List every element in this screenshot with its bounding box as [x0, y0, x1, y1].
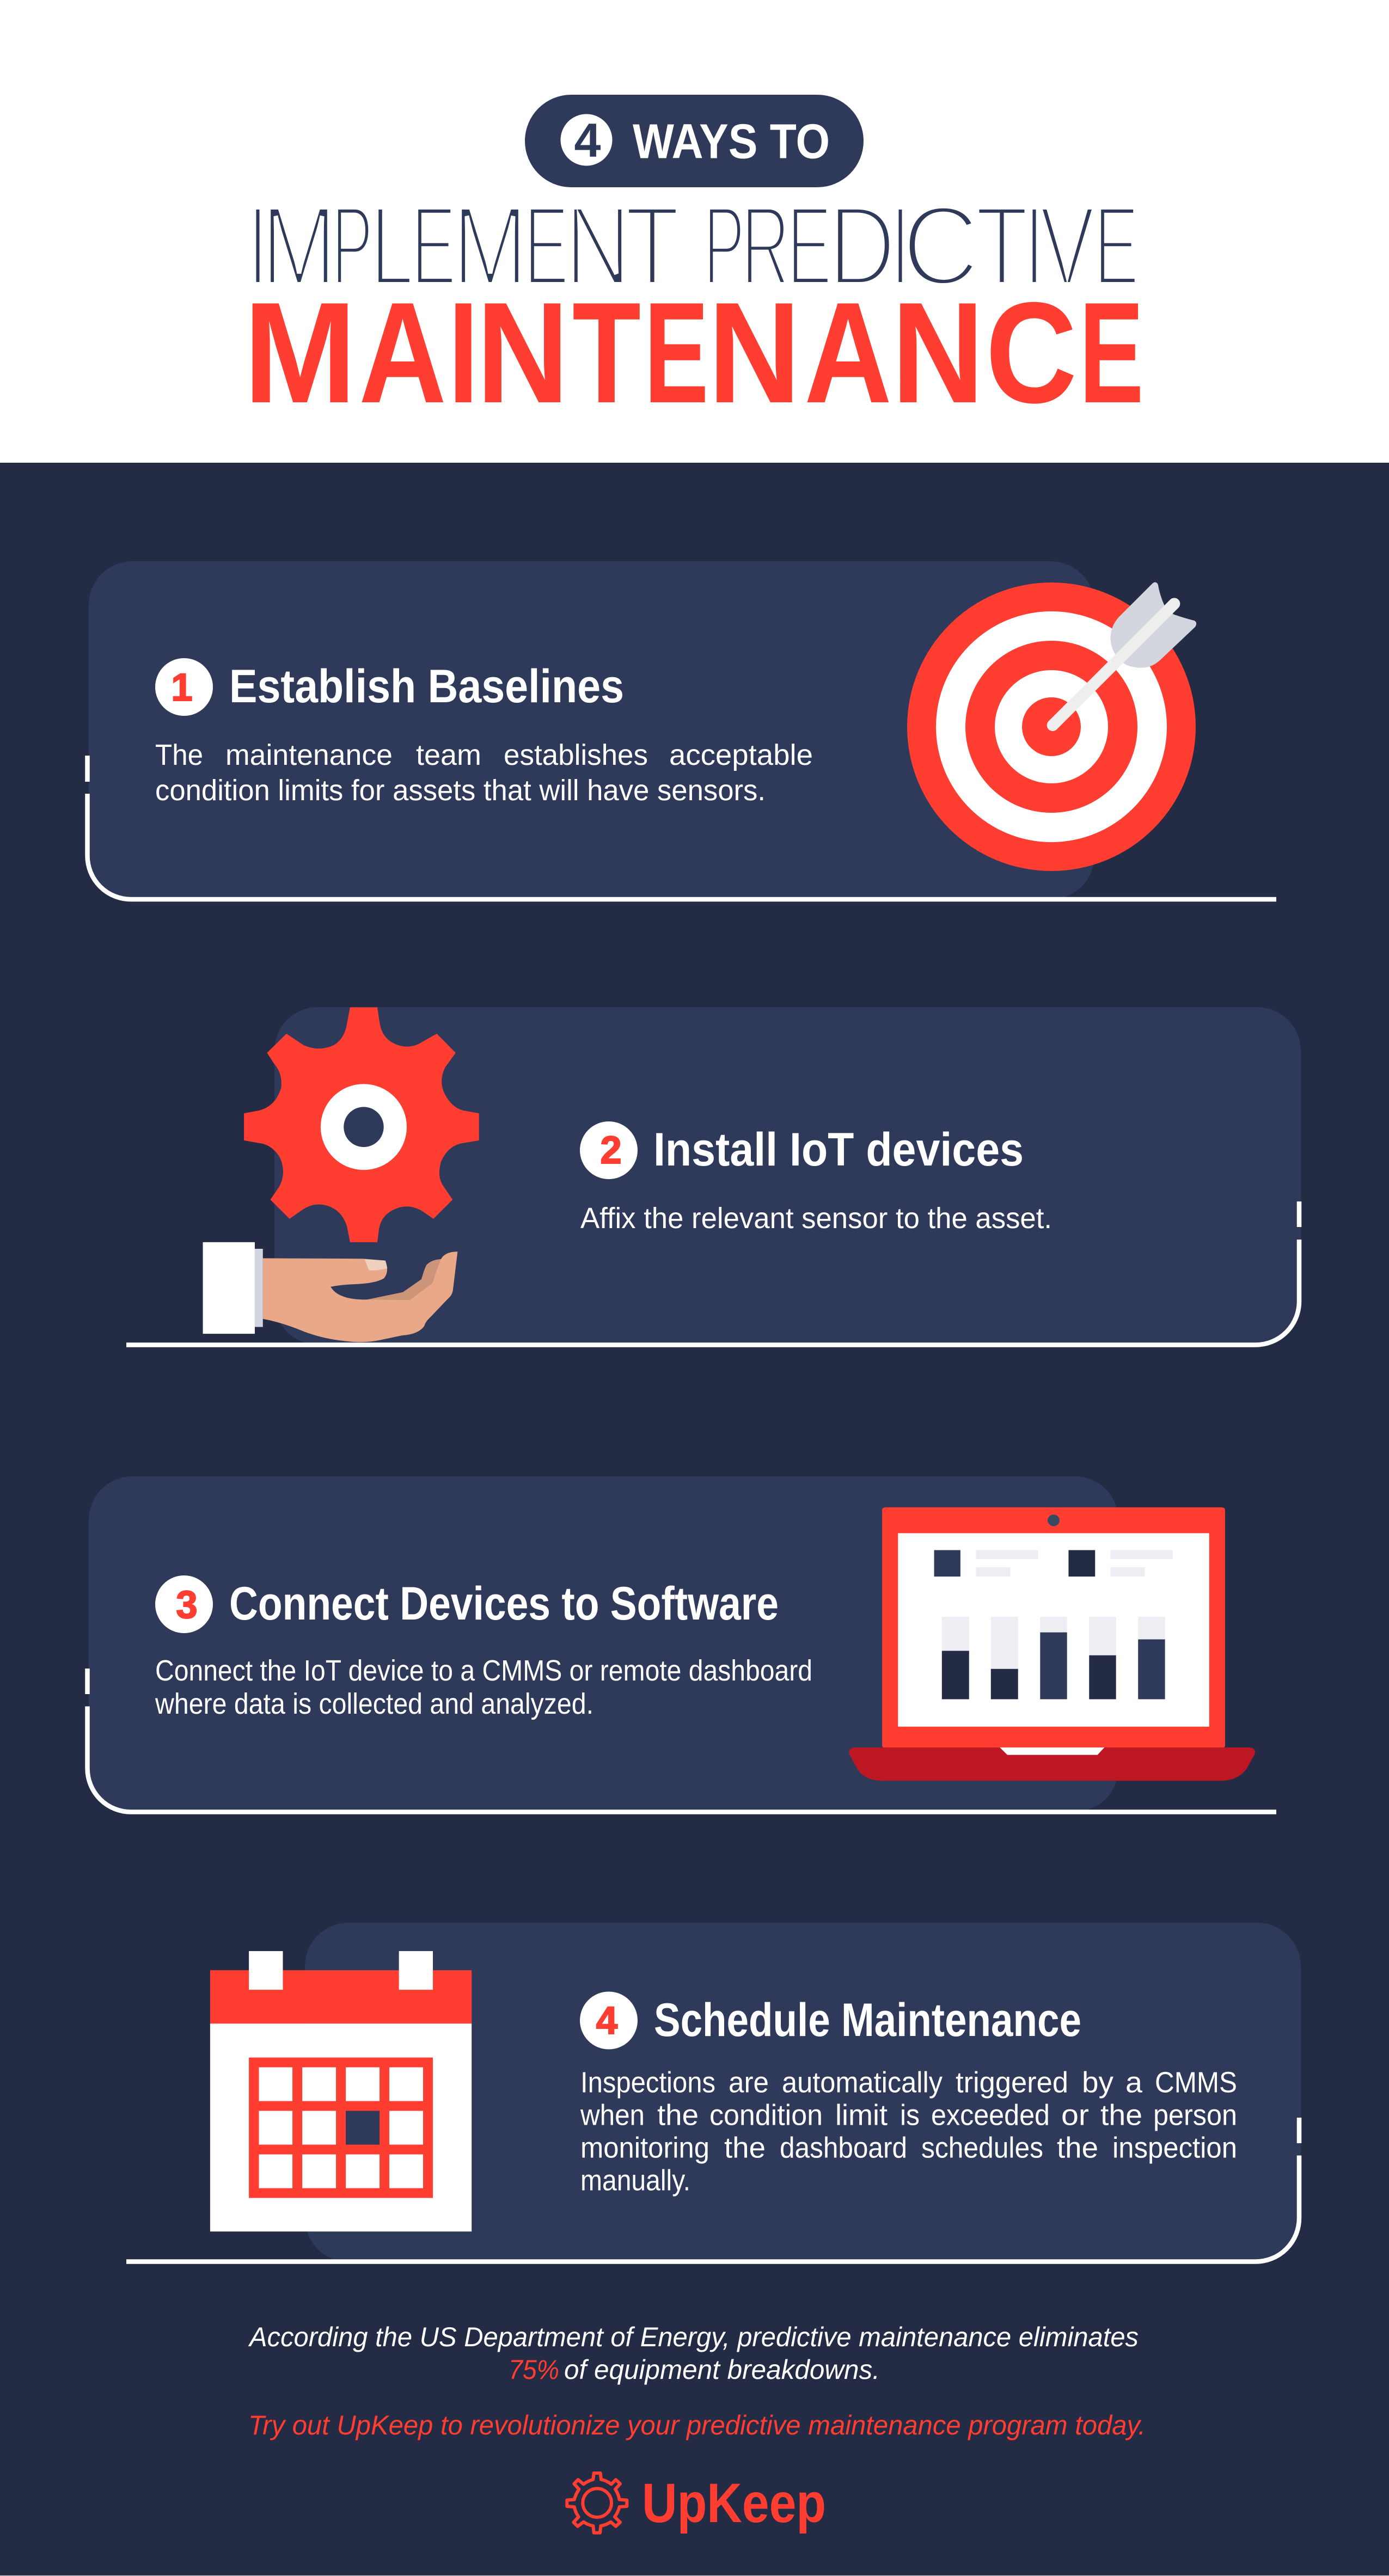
step number 3: 3	[176, 1584, 198, 1627]
panel background	[89, 561, 1094, 899]
heading line: implement predictive: C	[902, 183, 980, 309]
heading line: maintenance: N	[892, 272, 984, 433]
heading line: implement predictive: P	[332, 183, 373, 309]
body text: dashboard	[780, 2132, 907, 2164]
icon: gear over open hand	[203, 1007, 479, 1342]
heading line: implement predictive: L	[370, 183, 414, 309]
heading line: implement predictive: P	[703, 183, 745, 309]
heading line: implement predictive: D	[828, 183, 896, 309]
body text: the	[1057, 2132, 1098, 2164]
heading line: implement predictive: T	[625, 183, 678, 309]
heading line: maintenance: N	[476, 272, 569, 433]
hand	[203, 1242, 457, 1342]
body text: manually.	[580, 2164, 690, 2197]
heading line: implement predictive: R	[741, 183, 790, 309]
body text: exceeded	[931, 2099, 1050, 2132]
body text: Affix the relevant sensor to the asset.	[580, 1202, 1052, 1235]
body text: acceptable	[669, 739, 813, 771]
body text: team	[416, 739, 481, 771]
body text: condition limits for assets that will have sensors.	[155, 774, 766, 807]
gear	[244, 1007, 479, 1242]
heading line: implement predictive: N	[565, 183, 631, 309]
panel background	[89, 1476, 1118, 1812]
heading: Schedule Maintenance	[654, 1994, 1081, 2046]
closing statement: According the US Department of Energy, predictive maintenance eliminates	[248, 2322, 1139, 2352]
body text: or	[1061, 2099, 1089, 2132]
panel background	[305, 1923, 1301, 2262]
call to action: Try out UpKeep to revolutionize your predictive maintenance program today.	[248, 2410, 1146, 2440]
body text: automatically	[782, 2066, 943, 2099]
body text: limit	[835, 2099, 888, 2132]
heading line: implement predictive: T	[975, 183, 1029, 309]
body text: The	[155, 739, 203, 771]
body text: are	[729, 2066, 769, 2099]
wordmark: UpKeep	[642, 2472, 826, 2534]
heading line: implement predictive: I	[1024, 183, 1044, 309]
icon: target with arrow	[907, 582, 1196, 871]
body text: where data is collected and analyzed.	[155, 1688, 593, 1720]
body text: monitoring	[580, 2132, 709, 2164]
panel: step 3 connect devices to software	[87, 1476, 1276, 1812]
body text: the	[1100, 2099, 1142, 2132]
badge: 4 ways to	[525, 95, 864, 187]
body text: schedules	[921, 2132, 1043, 2164]
heading line: maintenance: E	[644, 272, 709, 433]
body text: by	[1082, 2066, 1113, 2099]
body text: establishes	[504, 739, 648, 771]
body text	[155, 1654, 812, 1720]
step number 4: 4	[596, 2000, 618, 2043]
body text	[155, 739, 813, 807]
heading: Install IoT devices	[653, 1124, 1024, 1176]
body text: Connect the IoT device to a CMMS or remote dashboard	[155, 1654, 812, 1687]
step number 2: 2	[600, 1129, 622, 1172]
closing statement	[248, 2322, 1139, 2385]
body text: condition	[709, 2099, 823, 2132]
heading line: implement predictive: E	[524, 183, 569, 309]
panel: step 1 establish baselines	[87, 561, 1276, 899]
heading line: maintenance: E	[1079, 272, 1143, 433]
panel outline	[87, 756, 1276, 899]
heading line: implement predictive: E	[787, 183, 832, 309]
heading line: implement predictive: E	[1094, 183, 1139, 309]
heading line: implement predictive: V	[1039, 183, 1095, 309]
body text: maintenance	[225, 739, 393, 771]
icon: gear outline	[567, 2473, 627, 2533]
closing statement: 75%	[509, 2354, 559, 2385]
body text: person	[1153, 2099, 1237, 2132]
body text: a	[1125, 2066, 1143, 2099]
title block	[243, 95, 1143, 433]
heading: Establish Baselines	[229, 660, 624, 713]
panel outline	[87, 1669, 1276, 1812]
badge: 4 ways to: WAYS TO	[633, 114, 830, 169]
heading line: implement predictive: I	[890, 183, 910, 309]
panel outline	[126, 1201, 1299, 1345]
heading line: maintenance: A	[359, 272, 446, 433]
heading line: maintenance: C	[986, 272, 1077, 433]
heading line: implement predictive: M	[452, 183, 528, 309]
heading line: implement predictive: I	[248, 183, 268, 309]
heading line: maintenance: T	[572, 272, 641, 433]
step number 4	[580, 1991, 638, 2049]
step number 2	[580, 1121, 638, 1179]
body text: Inspections	[580, 2066, 715, 2099]
body text: inspection	[1112, 2132, 1237, 2164]
heading line: maintenance: I	[448, 272, 479, 433]
icon: calendar	[210, 1951, 472, 2231]
body text: CMMS	[1155, 2066, 1237, 2099]
panel outline	[126, 2118, 1299, 2261]
heading line: implement predictive: E	[411, 183, 456, 309]
badge: 4 ways to: 4	[574, 113, 601, 167]
body text	[580, 2066, 1237, 2197]
heading line: implement predictive: M	[261, 183, 336, 309]
panel background	[274, 1007, 1301, 1345]
logo: UpKeep	[567, 2472, 826, 2534]
body text: the	[724, 2132, 766, 2164]
step number 1	[155, 658, 213, 716]
heading line: maintenance: M	[243, 272, 357, 433]
heading line: maintenance: N	[708, 272, 800, 433]
body text: the	[657, 2099, 699, 2132]
heading: Connect Devices to Software	[229, 1578, 779, 1630]
body text: when	[580, 2099, 645, 2132]
body text: is	[900, 2099, 920, 2132]
body text: triggered	[956, 2066, 1068, 2099]
closing statement: of equipment breakdowns.	[564, 2354, 880, 2385]
step number 1: 1	[171, 666, 193, 709]
heading line: maintenance: A	[804, 272, 892, 433]
icon: laptop with dashboard	[849, 1507, 1255, 1781]
panel: step 4 schedule maintenance	[126, 1923, 1301, 2262]
step number 3	[155, 1575, 213, 1633]
panel: step 2 install IoT devices	[126, 1007, 1301, 1345]
